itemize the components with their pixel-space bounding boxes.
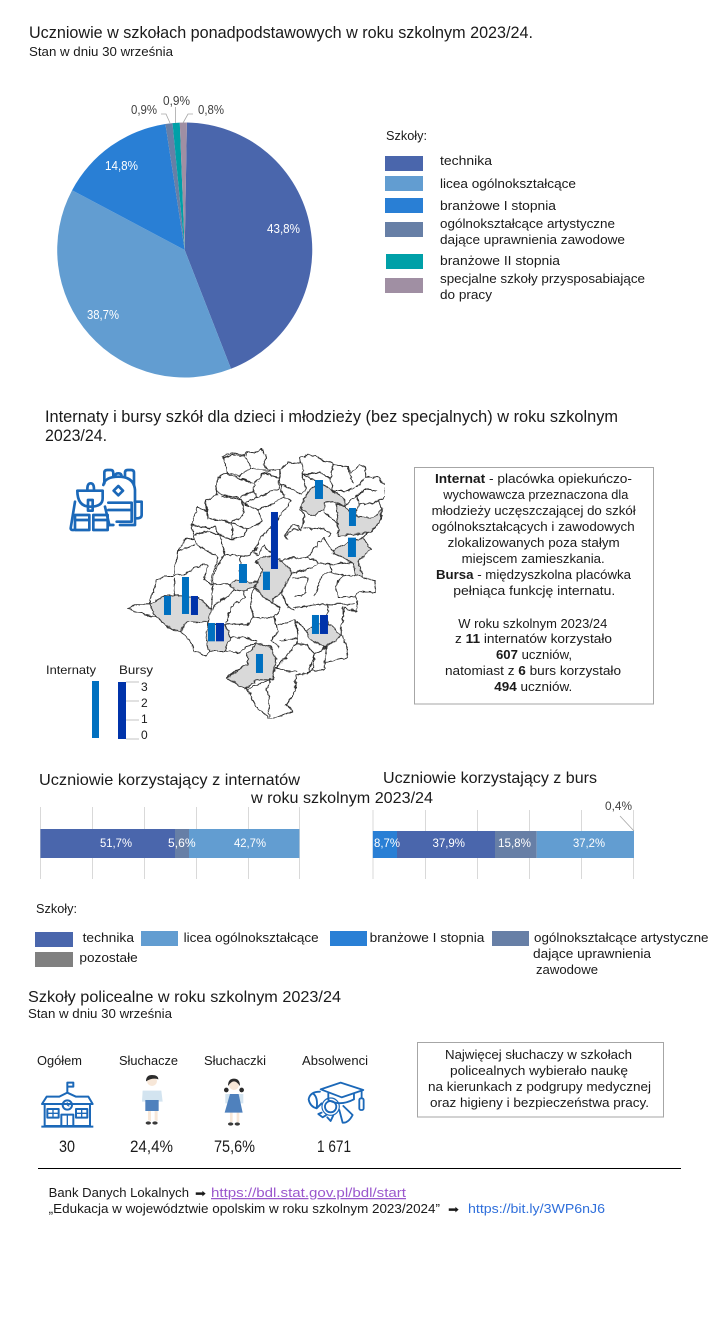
map legend: bar scale: 2	[141, 696, 148, 710]
stat: male students	[119, 1054, 178, 1156]
legend: school types for stacked bars: technika	[83, 931, 134, 945]
map legend: bar scale: 1	[141, 712, 148, 726]
legend: school types for stacked bars: Szkoły:	[36, 902, 77, 916]
stat: male students: 24,4%	[130, 1137, 173, 1156]
map legend: bar scale: 0	[141, 728, 148, 742]
legend: school types for pie chart: dające uprawnienia zawodowe	[440, 233, 625, 247]
stat: graduates	[302, 1054, 368, 1156]
map legend: bar scale: 3	[141, 680, 148, 694]
heading: dormitories and boarding houses: Internaty i bursy szkół dla dzieci i młodzieży (bez specjalnych) w roku szkolnym	[45, 408, 618, 426]
stacked bar: dormitories: 42,7%	[234, 836, 266, 850]
legend: school types for stacked bars: licea ogólnokształcące	[184, 931, 319, 945]
title: pupils in upper-secondary schools: Uczniowie w szkołach ponadpodstawowych w roku szkolnym 2023/24.	[29, 24, 533, 42]
callout: definitions of dormitory and boarding house: młodzieży uczęszczającej do szkół	[432, 504, 636, 518]
map legend: bar scale: Bursy	[119, 663, 153, 677]
callout: most popular fields of study: na kierunkach z podgrupy medycznej	[428, 1080, 651, 1094]
heading: dormitories and boarding houses: 2023/24.	[45, 427, 107, 445]
stacked bar: dormitories: 5,6%	[168, 836, 196, 850]
pie chart: school types: 14,8%	[105, 159, 138, 173]
map: districts of Opole voivodeship	[127, 448, 385, 718]
legend: school types for stacked bars	[35, 902, 709, 977]
heading: dormitories and boarding houses	[45, 408, 618, 445]
callout: most popular fields of study: Najwięcej słuchaczy w szkołach	[445, 1048, 632, 1062]
stacked bar: dormitories: 51,7%	[100, 836, 132, 850]
legend: school types for stacked bars: pozostałe	[79, 951, 138, 965]
pie chart: school types: 0,8%	[198, 103, 224, 117]
callout: definitions of dormitory and boarding house: W roku szkolnym 2023/24	[458, 617, 607, 631]
legend: school types for pie chart: specjalne szkoły przysposabiające	[440, 272, 645, 286]
callout: definitions of dormitory and boarding house: wychowawcza przeznaczona dla	[442, 488, 628, 502]
stat: graduates: Absolwenci	[302, 1054, 368, 1068]
stat: total schools	[37, 1054, 93, 1156]
stacked bar: boarding houses: 15,8%	[498, 836, 531, 850]
sources: links: https://bit.ly/3WP6nJ6	[468, 1202, 605, 1216]
stacked bar: boarding houses: 8,7%	[374, 836, 400, 850]
stacked bar: boarding houses: 0,4%	[605, 799, 632, 813]
icon: boy	[142, 1075, 163, 1125]
pie chart: school types: 43,8%	[267, 222, 300, 236]
sources: links: Bank Danych Lokalnych	[49, 1186, 189, 1200]
pie chart: school types: 0,9%	[131, 103, 157, 117]
stacked bar: boarding houses: 37,2%	[573, 836, 605, 850]
callout: definitions of dormitory and boarding house: zlokalizowanych poza stałym	[448, 536, 620, 550]
map legend: bar scale	[46, 663, 153, 742]
icon: girl	[224, 1079, 244, 1126]
sources: links: https://bdl.stat.gov.pl/bdl/start	[211, 1186, 407, 1200]
callout: definitions of dormitory and boarding house: Internat - placówka opiekuńczo-	[435, 472, 632, 486]
callout: definitions of dormitory and boarding house: 607 uczniów,	[496, 648, 572, 662]
stat: female students: Słuchaczki	[204, 1054, 266, 1068]
legend: school types for pie chart: technika	[440, 154, 492, 168]
legend: school types for stacked bars: branżowe I stopnia	[370, 931, 484, 945]
callout: most popular fields of study	[418, 1042, 664, 1117]
stat: female students	[204, 1054, 266, 1156]
sources: links	[49, 1186, 605, 1216]
heading: post-secondary schools: Szkoły policealne w roku szkolnym 2023/24	[28, 989, 341, 1006]
stat: female students: 75,6%	[214, 1137, 255, 1156]
legend: school types for pie chart: ogólnokształcące artystyczne	[440, 217, 615, 231]
callout: definitions of dormitory and boarding house: Bursa - międzyszkolna placówka	[436, 568, 631, 582]
heading: pupils using boarding houses: Uczniowie korzystający z burs	[383, 770, 597, 787]
stacked bar: dormitories	[40, 807, 300, 879]
stat: male students: Słuchacze	[119, 1054, 178, 1068]
legend: school types for pie chart: branżowe II stopnia	[440, 254, 560, 268]
legend: school types for pie chart: branżowe I stopnia	[440, 199, 556, 213]
legend: school types for pie chart	[385, 129, 645, 302]
sources: links: ➡	[195, 1187, 206, 1200]
stacked bar: boarding houses: 37,9%	[432, 836, 465, 850]
callout: definitions of dormitory and boarding house: 494 uczniów.	[494, 680, 572, 694]
stat: total schools: 30	[59, 1137, 75, 1156]
legend: school types for stacked bars: dające uprawnienia	[533, 947, 651, 961]
icon: backpacks	[71, 470, 142, 530]
legend: school types for pie chart: do pracy	[440, 288, 493, 302]
callout: definitions of dormitory and boarding house: z 11 internatów korzystało	[455, 632, 612, 646]
legend: school types for stacked bars: zawodowe	[536, 963, 598, 977]
pie chart: school types	[57, 94, 312, 378]
callout: most popular fields of study: oraz higieny i bezpieczeństwa pracy.	[430, 1096, 649, 1110]
sources: links: „Edukacja w województwie opolskim w roku szkolnym 2023/2024”	[49, 1202, 440, 1216]
subtitle: date: Stan w dniu 30 września	[29, 45, 173, 59]
heading: pupils using dormitories: Uczniowie korzystający z internatów	[39, 772, 300, 789]
pie chart: school types: 38,7%	[87, 308, 119, 322]
callout: definitions of dormitory and boarding house: miejscem zamieszkania.	[462, 552, 605, 566]
callout: definitions of dormitory and boarding house	[414, 468, 654, 704]
legend: school types for pie chart: licea ogólnokształcące	[440, 177, 576, 191]
stat: graduates: 1 671	[317, 1137, 351, 1156]
callout: definitions of dormitory and boarding house: pełniąca funkcję internatu.	[453, 584, 615, 598]
sources: links: ➡	[448, 1203, 459, 1216]
heading: school year: w roku szkolnym 2023/24	[250, 790, 433, 807]
map bars: dormitories and boarding houses by district	[164, 480, 356, 673]
callout: definitions of dormitory and boarding house: natomiast z 6 burs korzystało	[445, 664, 621, 678]
legend: school types for pie chart: Szkoły:	[386, 129, 427, 143]
icon: school building	[41, 1083, 93, 1127]
pie chart: school types: 0,9%	[163, 94, 190, 108]
legend: school types for stacked bars: ogólnokształcące artystyczne	[534, 931, 709, 945]
icon: graduation cap and diploma	[309, 1083, 364, 1123]
stacked bar: boarding houses	[373, 799, 634, 879]
map legend: bar scale: Internaty	[46, 663, 96, 677]
callout: definitions of dormitory and boarding house: ogólnokształcących i zawodowych	[432, 520, 635, 534]
callout: most popular fields of study: policealnych wybierało naukę	[450, 1064, 628, 1078]
stat: total schools: Ogółem	[37, 1054, 82, 1068]
subtitle: date: Stan w dniu 30 września	[28, 1007, 172, 1021]
